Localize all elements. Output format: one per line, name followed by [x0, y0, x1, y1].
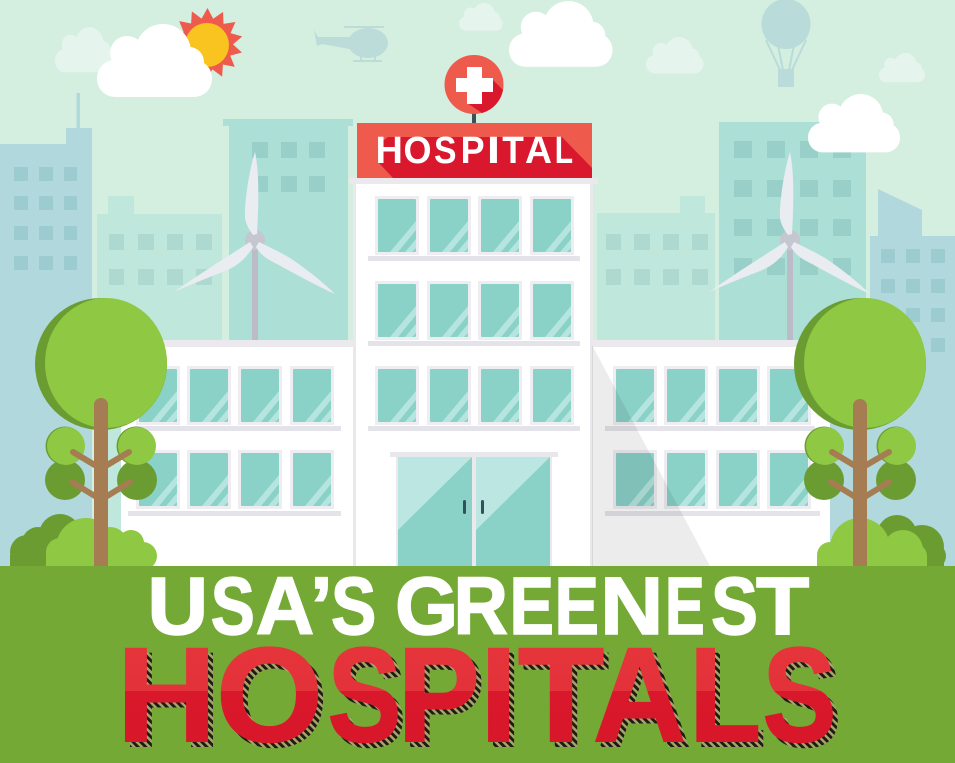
hospital building	[121, 178, 830, 566]
hospital sign board: I	[487, 130, 500, 172]
clouds	[55, 1, 925, 97]
title line 1: E	[554, 561, 599, 652]
icon: hot air balloon	[762, 0, 810, 87]
left bushes	[10, 514, 157, 578]
rooftop sign	[357, 55, 592, 178]
title line 2 shadow stripes	[122, 626, 841, 763]
green ground band	[0, 566, 955, 763]
icon: helicopter	[314, 26, 388, 62]
title line 1: E	[665, 561, 705, 652]
icon: right wind turbine	[709, 152, 870, 342]
hospital sign board: P	[461, 130, 485, 172]
title line 1: S	[211, 561, 255, 652]
trunk and branches	[831, 406, 889, 566]
hospital sign board: H	[376, 130, 403, 172]
icon: left wind turbine	[174, 152, 335, 342]
title line 1: T	[756, 561, 809, 652]
right tree	[794, 298, 946, 578]
skyline: right	[597, 122, 955, 566]
title line 2 red face	[117, 621, 836, 763]
left wing	[121, 340, 355, 566]
title line 1: ’	[310, 561, 333, 652]
title line 1: E	[510, 561, 554, 652]
skyline: left	[0, 93, 353, 566]
title	[117, 561, 841, 763]
title line 1: N	[600, 561, 663, 652]
entrance doors	[390, 452, 558, 566]
hospital sign board: A	[525, 130, 552, 172]
icon: sun	[164, 2, 250, 86]
hospital sign board: L	[555, 130, 573, 172]
icon: medical cross badge	[444, 55, 504, 114]
hospital sign board: S	[434, 130, 456, 172]
trunk and branches	[72, 405, 130, 566]
sign pole	[472, 112, 476, 124]
centre block	[349, 178, 598, 566]
title line 1: R	[454, 561, 508, 652]
right wing	[591, 340, 830, 566]
building shadow	[592, 345, 710, 566]
right bushes	[817, 515, 946, 578]
hospital sign board: T	[502, 130, 524, 172]
title line 1: S	[711, 561, 758, 652]
title line 1: S	[331, 561, 376, 652]
hospital sign board: O	[404, 130, 432, 172]
title line 1: G	[395, 561, 458, 652]
white cloud over right tower	[808, 94, 900, 152]
hospital sign board	[357, 123, 592, 178]
left tree	[10, 298, 167, 578]
title line 1: U	[147, 561, 208, 652]
title line 1: A	[256, 561, 314, 652]
